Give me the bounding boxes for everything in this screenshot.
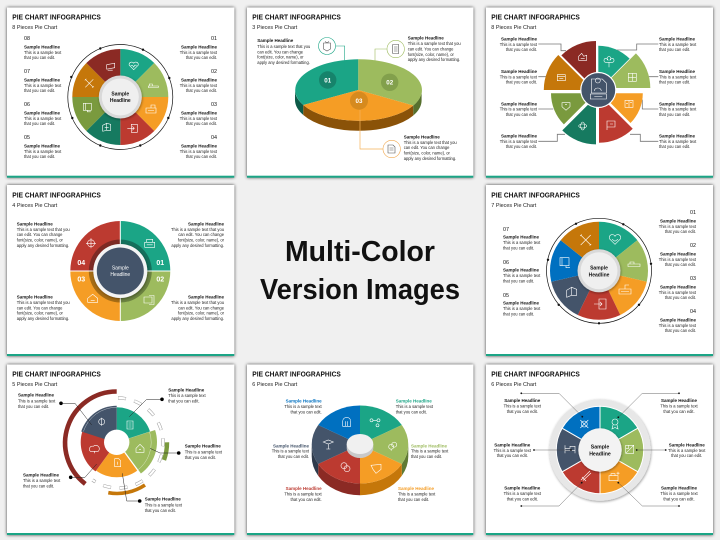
panel: 3 pieces 3D pie chart [247,8,473,178]
text block 03: can edit. You can change [17,306,63,310]
icon: dark red slice [579,53,587,60]
text block right 2: This is a sample text [659,74,697,79]
text block 04: Sample Headline [660,317,696,322]
text block 05: 05 [503,293,509,299]
text block teal: This is a sample text [168,393,206,398]
text block blue: Sample Headline [286,398,322,403]
text block 03: can edit. You can change [404,145,450,150]
text block red: This is a sample text [23,478,61,483]
exploded pie chart [542,31,660,153]
text block 06: This is a sample text [24,116,62,121]
text block 02: can edit. You can change [178,306,225,310]
text block 01: This is a sample text [659,224,697,229]
text block navy: that you can edit. [18,404,49,409]
icon: green slice [389,442,397,451]
title: PIE CHART INFOGRAPHICS [12,192,101,200]
text block 01: apply any desired formatting. [257,60,310,65]
icon: tools [85,79,94,88]
text block 01: that you can edit. [665,229,696,234]
text block 03: This is a sample text [659,290,697,295]
text block 04: can edit. You can change [17,232,63,237]
text block 01: font(size, color, name), or [178,238,225,242]
text block 07: that you can edit. [503,246,534,250]
text block red: that you can edit. [291,497,322,502]
text block 01: This is a sample text [180,50,218,55]
text block 03: apply any desired formatting. [404,156,456,161]
text block 01: Sample Headline [257,38,294,43]
text block 06: that you can edit. [503,278,534,284]
text block 05: This is a sample text [24,149,62,154]
text block 03: that you can edit. [186,121,217,126]
text block 07: This is a sample text [503,240,541,245]
text block left 2: Sample Headline [501,69,537,74]
text block 01: This is a sample text that you [257,44,310,49]
icon: red slice [607,121,615,130]
text block orange: that you can edit. [145,508,176,513]
text block 02: This is a sample text [659,257,697,262]
text block 02: Sample Headline [408,36,444,41]
text block 02: font(size, color, name), or [408,52,455,57]
icon: heart [129,62,138,70]
icon: orange slice [88,294,98,302]
icon: olive slice [562,103,570,110]
text block 05: This is a sample text [503,306,541,311]
title: PIE CHART INFOGRAPHICS [252,370,341,378]
leader lines [520,392,680,507]
icon: red slice [86,238,96,248]
icon: amber slice [557,75,565,81]
text block 08: Sample Headline [24,44,61,49]
text block 02: apply any desired formatting. [408,57,460,62]
text block teal: Sample Headline [168,388,205,393]
subtitle: 8 Pieces Pie Chart [12,25,58,31]
text block 03: This is a sample text that you [404,140,457,145]
text block navy: Sample Headline [273,443,309,448]
pie chart: 7 slices [543,210,661,332]
text block green: Sample Headline [411,443,448,448]
text block 01: that you can edit. [186,55,217,60]
center label: Sample [112,265,129,271]
connector lines [538,44,658,141]
text block 01: can edit. You can change [178,232,225,237]
text block 08: 08 [24,36,30,42]
center heading: Multi-Color Version Images: Multi-Color [285,236,435,268]
text block 02: This is a sample text that you [408,41,461,46]
icon: orange slice [115,459,121,467]
3D pie chart: 01 [324,77,332,84]
3D pie chart: 6 slices [312,406,408,495]
number 03: 03 [77,276,85,284]
icon: teal slice [612,419,618,429]
subtitle: 8 Pieces Pie Chart [491,25,537,31]
text block right 1: that you can edit. [659,47,690,52]
text block top left: Sample Headline [504,398,541,403]
text block 01: 01 [690,210,696,216]
subtitle: 7 Pieces Pie Chart [491,203,537,209]
text block left 3: that you can edit. [506,112,537,117]
text block 03: Sample Headline [404,134,440,139]
text block 02: Sample Headline [188,295,224,300]
text block red: that you can edit. [23,484,54,488]
title: PIE CHART INFOGRAPHICS [491,192,580,200]
text block 04: Sample Headline [181,143,217,148]
text block top right: that you can edit. [663,409,695,414]
text block 06: that you can edit. [24,121,55,126]
panel: 8 pieces pie chart with numbers [7,8,234,178]
title: PIE CHART INFOGRAPHICS [491,370,580,378]
number 02: 02 [156,276,164,284]
text block 04: This is a sample text that you [17,227,70,232]
text block middle left: This is a sample text [494,448,532,453]
text block right 4: Sample Headline [659,134,696,139]
text block left 2: that you can edit. [506,80,537,84]
text block 01: font(size, color, name), or [257,54,304,60]
icon: blue slice [343,417,351,426]
outer arc: orange [108,485,145,493]
icon: door [127,124,137,132]
icon: red slice [89,445,99,453]
text block 02: Sample Headline [660,251,696,256]
icon: green slice [144,296,154,304]
text block 04: font(size, color, name), or [17,238,64,242]
text block middle right: Sample Headline [669,443,705,448]
center label: Headline [589,272,610,278]
text block right 3: Sample Headline [659,101,696,106]
icon: navy slice [99,418,105,426]
text block 04: apply any desired formatting. [17,243,69,248]
ringed pie chart [543,395,657,505]
subtitle: 5 Pieces Pie Chart [12,382,58,388]
panel: 6 pieces 3D pie chart [247,364,473,535]
text block teal: Sample Headline [396,398,432,403]
text block 03: This is a sample text that you [17,300,70,305]
text block top right: Sample Headline [661,398,698,403]
text block 05: that you can edit. [503,312,534,316]
donut chart: 4 slices [69,220,171,322]
text block 02: This is a sample text that you [171,300,224,305]
icon: keyboard [619,285,631,294]
text block bottom left: Sample Headline [504,486,541,491]
icon: dark teal slice [579,122,587,130]
text block red: This is a sample text [284,492,323,496]
icon: heart [609,235,621,244]
subtitle: 4 Pieces Pie Chart [12,203,58,209]
text block 04: Sample Headline [17,221,53,226]
dashed outline ring [92,398,163,488]
icon: teal slice [604,57,614,67]
icon: circle 02 [387,40,404,58]
text block green: that you can edit. [411,454,442,459]
number 04: 04 [77,260,85,267]
text block blue: This is a sample text [284,404,323,409]
text block 08: that you can edit. [24,55,55,60]
pie chart: 8 slices [62,39,178,155]
title: PIE CHART INFOGRAPHICS [491,14,580,22]
text block navy: Sample Headline [18,393,55,398]
text block 01: Sample Headline [660,218,696,223]
3D pie chart [295,59,422,131]
icon: circle 01 [318,38,336,54]
text block orange: that you can edit. [398,497,429,502]
text block 03: font(size, color, name), or [17,310,64,316]
text block 05: Sample Headline [503,301,540,306]
text block 02: that you can edit. [186,88,217,93]
text block 01: Sample Headline [181,44,217,49]
text block green: that you can edit. [185,455,216,460]
text block orange: Sample Headline [145,497,181,502]
icon: monitor [83,103,91,112]
text block right 4: that you can edit. [659,144,690,149]
text block teal: that you can edit. [168,398,199,404]
text block bottom right: that you can edit. [663,496,695,502]
text block 07: This is a sample text [24,83,62,88]
center label: Headline [589,452,611,458]
text block 03: apply any desired formatting. [17,316,69,321]
text block 05: 05 [24,135,30,141]
text block 05: Sample Headline [24,143,61,148]
text block orange: This is a sample text [398,492,436,496]
text block 01: 01 [211,36,217,42]
text block right 1: This is a sample text [659,42,697,47]
text block teal: This is a sample text [396,404,434,409]
text block 05: that you can edit. [24,154,55,159]
text block 06: Sample Headline [503,268,540,273]
text block right 2: that you can edit. [659,80,690,84]
text block 04: 04 [690,309,696,315]
text block 03: Sample Headline [181,110,217,115]
icon: tray [628,262,640,266]
text block top left: This is a sample text [504,404,542,408]
center label: Sample [591,444,609,450]
text block middle left: that you can edit. [497,453,528,458]
number 01: 01 [156,260,164,267]
text block 02: apply any desired formatting. [171,316,224,321]
text block 03: 03 [690,276,696,282]
text block left 4: This is a sample text [500,139,538,144]
text block navy: This is a sample text [18,398,56,404]
outer arc: green [164,442,167,460]
text block 01: apply any desired formatting. [171,243,224,248]
title: PIE CHART INFOGRAPHICS [12,14,101,22]
text block 07: Sample Headline [24,77,61,82]
text block 03: font(size, color, name), or [404,150,451,156]
text block left 2: This is a sample text [500,74,538,79]
text block blue: that you can edit. [291,410,322,414]
icon: blue slice [580,420,588,428]
text block red: Sample Headline [23,473,60,478]
text block bottom left: that you can edit. [507,496,538,502]
subtitle: 3 Pieces Pie Chart [252,25,298,31]
text block 07: 07 [24,69,30,75]
text block left 4: that you can edit. [506,144,537,149]
text block 01: This is a sample text that you [171,227,224,232]
text block left 3: This is a sample text [500,107,538,112]
icon: orange slice [609,472,620,481]
text block 01: can edit. You can change [257,49,304,54]
icon: map [567,287,577,297]
text block right 3: This is a sample text [659,107,697,112]
text block 02: 02 [211,69,217,75]
text block bottom right: Sample Headline [661,486,698,491]
subtitle: 6 Pieces Pie Chart [252,382,298,388]
text block middle left: Sample Headline [494,443,531,448]
text block 06: 06 [503,260,509,266]
text block right 3: that you can edit. [659,112,690,117]
text block 02: 02 [690,243,696,249]
text block 04: This is a sample text [180,149,218,154]
text block 07: 07 [503,227,509,233]
title: PIE CHART INFOGRAPHICS [12,370,101,378]
text block 07: Sample Headline [503,235,540,240]
connector 01 [336,46,345,68]
text block 02: font(size, color, name), or [178,310,225,316]
text block middle right: that you can edit. [671,453,702,458]
icon: tools [580,234,591,246]
icon: teal slice [145,239,155,247]
panel: 5 pieces pie chart with arcs [7,364,234,535]
pie chart: 5 slices [68,398,167,490]
center heading: Multi-Color Version Images: Version Images [260,274,460,306]
text block middle right: This is a sample text [668,448,706,453]
text block right 4: This is a sample text [659,139,697,144]
outer arc: dark red [65,391,117,484]
text block 06: 06 [24,102,30,108]
text block right 2: Sample Headline [659,69,696,74]
text block 02: that you can edit. [665,262,696,267]
text block top right: This is a sample text [660,404,699,408]
text block 03: This is a sample text [180,116,218,121]
text block 02: can edit. You can change [408,46,454,52]
text block 03: that you can edit. [665,295,696,300]
icon: orange slice [625,100,633,107]
text block green: Sample Headline [185,444,221,449]
center label: Sample [590,265,608,271]
connector 02 [375,49,388,75]
text block 06: Sample Headline [24,110,61,115]
text block orange: Sample Headline [398,486,435,491]
text block left 4: Sample Headline [501,134,537,139]
text block 01: Sample Headline [188,221,224,226]
icon: monitor [560,258,570,268]
center label: Headline [110,272,130,278]
text block right 1: Sample Headline [659,37,696,42]
icon: teal slice [370,419,380,427]
icon: green slice [136,444,144,452]
icon: red slice [341,463,350,472]
text block 03: Sample Headline [660,284,696,289]
icon: teal slice [127,421,133,429]
connector 03 [360,110,383,149]
text block orange: This is a sample text [145,502,183,508]
panel: 7 pieces pie chart [486,185,713,356]
text block 04: that you can edit. [665,328,696,333]
text block 07: that you can edit. [24,88,55,93]
text block 04: 04 [211,135,217,141]
text block teal: that you can edit. [396,410,427,414]
icon: green slice [626,445,634,453]
text block navy: This is a sample text [272,448,310,454]
text block green: This is a sample text [411,448,449,454]
icon: orange slice [371,464,381,473]
center label: Sample [111,92,129,98]
text block 04: This is a sample text [659,323,697,328]
text block 03: 03 [211,102,217,108]
text block top left: that you can edit. [507,409,538,414]
text block left 1: that you can edit. [506,47,537,52]
text block left 1: This is a sample text [500,42,538,47]
text block bottom right: This is a sample text [660,491,699,496]
title: PIE CHART INFOGRAPHICS [252,14,341,22]
icon: notes [107,63,115,70]
3D pie chart: 03 [356,98,363,105]
subtitle: 6 Pieces Pie Chart [491,382,537,388]
text block red: Sample Headline [286,486,322,491]
text block green: This is a sample text [185,450,223,454]
icon: card [146,105,156,113]
text block left 1: Sample Headline [501,37,537,42]
icon: green slice [628,73,636,81]
icon: tray [148,84,158,88]
text block 08: This is a sample text [24,50,62,55]
icon: red slice [581,471,591,481]
icon: navy slice [565,445,575,453]
leader lines with dots [59,398,181,503]
panel: 8 pieces exploded pie chart [486,8,713,178]
text block left 3: Sample Headline [501,101,537,106]
text block 04: that you can edit. [186,154,217,159]
text block 03: Sample Headline [17,295,53,300]
text block 02: This is a sample text [180,83,218,88]
text block bottom left: This is a sample text [504,491,542,496]
text block 06: This is a sample text [503,273,541,278]
panel: 6 pieces ringed pie chart [486,364,713,535]
3D pie chart: 02 [386,80,394,87]
center label: Headline [110,98,131,104]
panel: 4 pieces pie chart [7,185,234,356]
icon: map [103,123,111,131]
text block 02: Sample Headline [181,77,217,82]
icon: navy slice [323,440,333,449]
icon: door [594,299,606,309]
text block navy: that you can edit. [278,454,309,459]
icon: circle 03 [383,140,400,158]
